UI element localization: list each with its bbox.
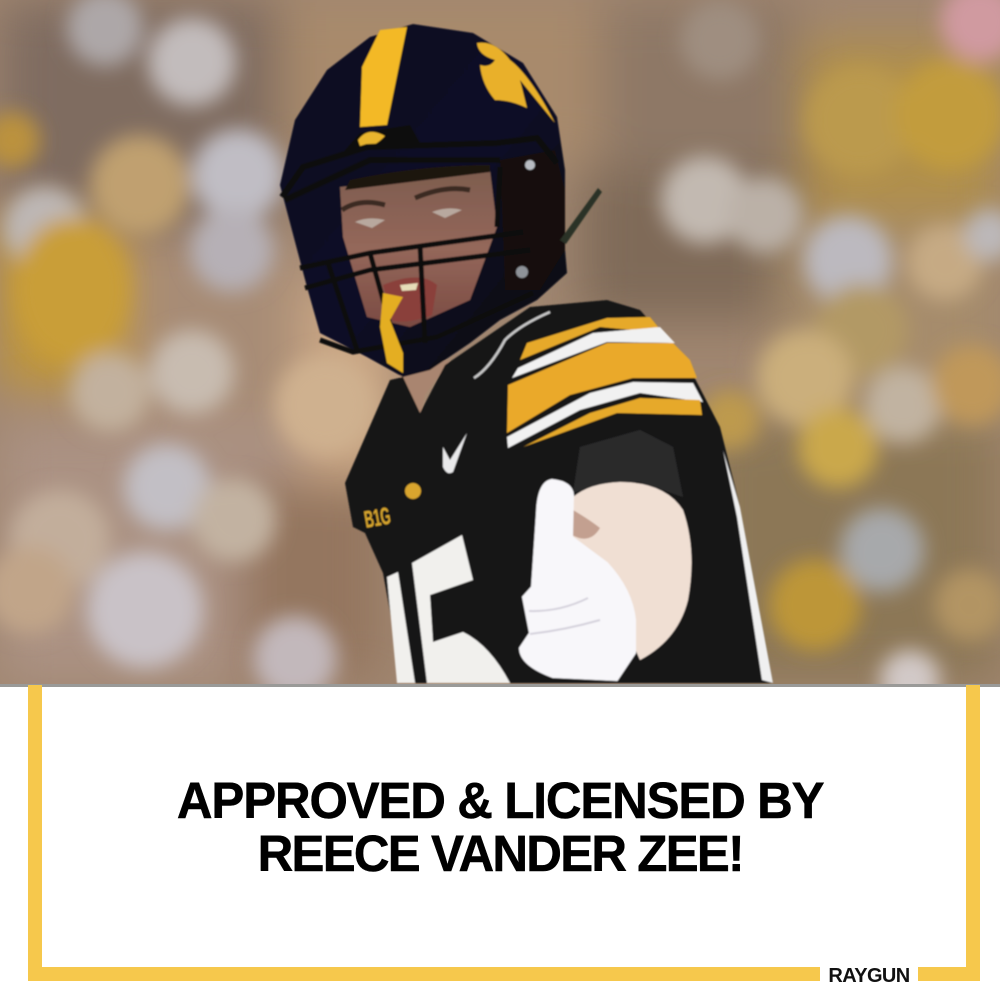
collar piping [474,312,550,378]
brand label: RAYGUN [828,965,910,987]
helmet hawk logo [477,43,555,123]
ear snap [525,160,535,170]
facemask [282,138,557,352]
sleeve [573,430,683,497]
helmet [280,24,602,377]
headline [177,772,824,882]
chin strap tab [560,188,602,244]
shoulder stripes [507,317,703,448]
hawk patch [405,483,421,499]
visor band hawk [358,132,385,147]
helmet shell [280,24,567,377]
visor band [345,125,420,153]
side panel stripe [723,450,773,683]
face [340,165,497,327]
arm [572,482,692,660]
blurred stadium crowd background [0,0,1000,710]
player jersey [345,300,773,683]
headline: REECE VANDER ZEE! [258,825,743,882]
mouthguard [380,293,403,373]
nike swoosh [443,433,467,473]
glove [520,480,635,680]
B1G patch: B1G [362,503,393,534]
jersey number [387,535,510,683]
headline: APPROVED & LICENSED BY [177,772,823,829]
helmet stripe [360,27,407,127]
arm shadow [572,510,600,539]
player neck [398,360,450,416]
photo: football player giving thumbs up [0,0,1000,684]
side shell [500,150,565,290]
